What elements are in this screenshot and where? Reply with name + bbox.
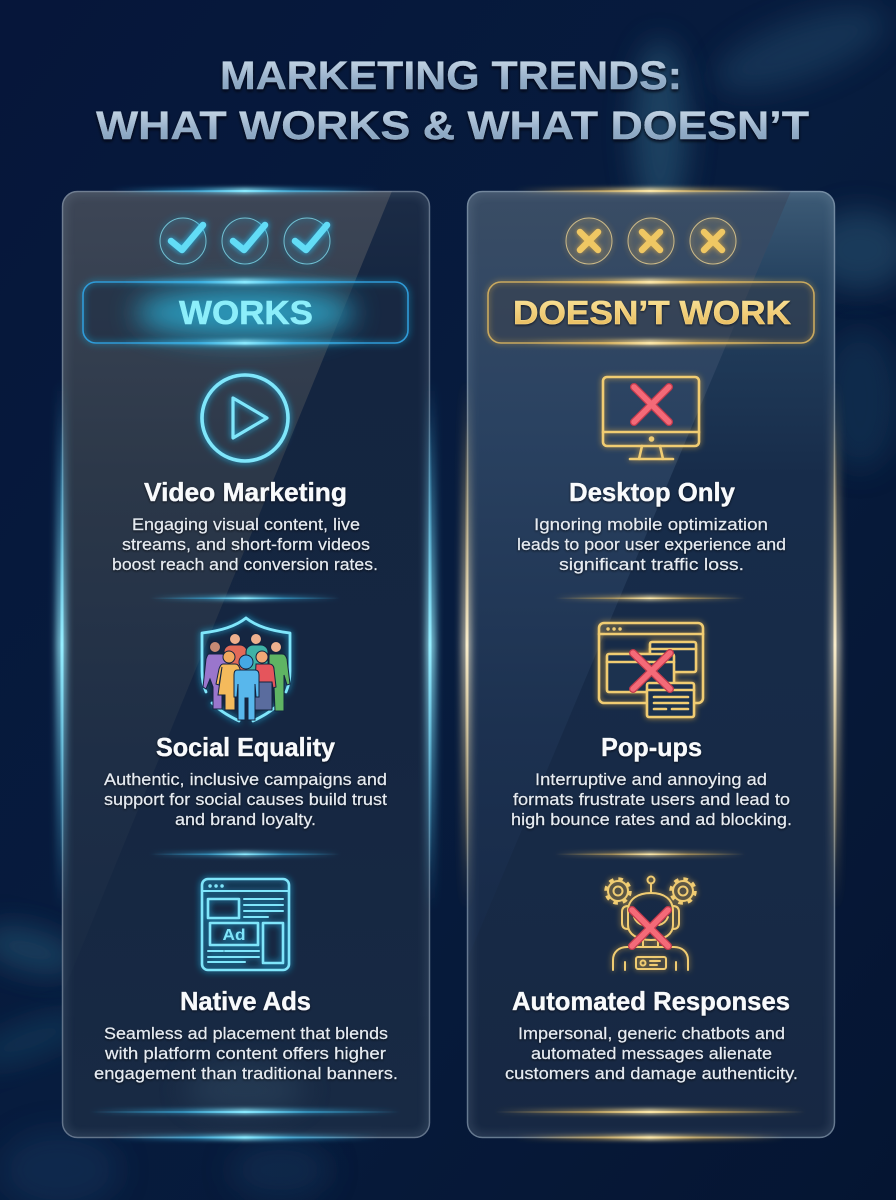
item: video marketing: Video Marketing — [144, 477, 347, 507]
item: desktop only: Desktop Only — [569, 477, 736, 507]
heading: works: WORKS — [179, 294, 313, 331]
heading: works — [83, 279, 408, 345]
title: MARKETING TRENDS: — [220, 54, 682, 98]
icon: play button — [202, 375, 288, 461]
icon: native ad layout — [202, 879, 289, 970]
item: video marketing: boost reach and conversion rates. — [112, 555, 378, 574]
panel background: works — [57, 188, 435, 1140]
icon: diverse people in shield — [202, 618, 290, 721]
panel background: doesn't work — [462, 188, 840, 1140]
panel: doesn't work — [462, 188, 840, 1140]
item: social equality — [104, 732, 387, 829]
icon: native ad layout: Ad — [222, 927, 246, 944]
item: desktop only — [517, 477, 786, 574]
item: pop-ups — [511, 732, 792, 829]
item: video marketing — [112, 477, 378, 574]
item: desktop only: significant traffic loss. — [559, 555, 744, 574]
item: automated responses: automated messages alienate — [531, 1044, 772, 1063]
title: WHAT WORKS & WHAT DOESN’T — [96, 104, 809, 148]
item: social equality: and brand loyalty. — [175, 810, 316, 829]
icons: three x marks — [566, 218, 736, 264]
title — [96, 54, 809, 148]
item: automated responses: Impersonal, generic chatbots and — [518, 1024, 785, 1043]
item: pop-ups: high bounce rates and ad blocking. — [511, 810, 792, 829]
icon: robot with x — [606, 876, 695, 970]
item: video marketing: Engaging visual content, live — [132, 515, 360, 534]
item: social equality: Authentic, inclusive campaigns and — [104, 770, 387, 789]
heading: doesn't work: DOESN’T WORK — [513, 294, 791, 331]
item: social equality: support for social causes build trust — [104, 790, 387, 809]
item: desktop only: leads to poor user experience and — [517, 535, 786, 554]
item: video marketing: streams, and short-form videos — [122, 535, 370, 554]
icons: three check marks — [160, 218, 330, 264]
item: pop-ups: formats frustrate users and lead to — [513, 790, 790, 809]
item: desktop only: Ignoring mobile optimization — [534, 515, 768, 534]
item: automated responses: customers and damage authenticity. — [505, 1064, 798, 1083]
item: native ads — [94, 986, 398, 1083]
item: native ads: with platform content offers higher — [104, 1044, 386, 1063]
icon: desktop monitor with x — [603, 377, 699, 459]
item: automated responses: Automated Responses — [512, 986, 790, 1016]
item: social equality: Social Equality — [156, 732, 336, 762]
heading: doesn't work — [488, 279, 814, 345]
item: native ads: Seamless ad placement that blends — [104, 1024, 388, 1043]
icon: pop-up windows with x — [599, 623, 703, 717]
item: native ads: Native Ads — [180, 986, 311, 1016]
item: pop-ups: Pop-ups — [601, 732, 702, 762]
item: pop-ups: Interruptive and annoying ad — [535, 770, 767, 789]
item: automated responses — [505, 986, 798, 1083]
panel: works — [57, 188, 435, 1140]
item: native ads: engagement than traditional banners. — [94, 1064, 398, 1083]
